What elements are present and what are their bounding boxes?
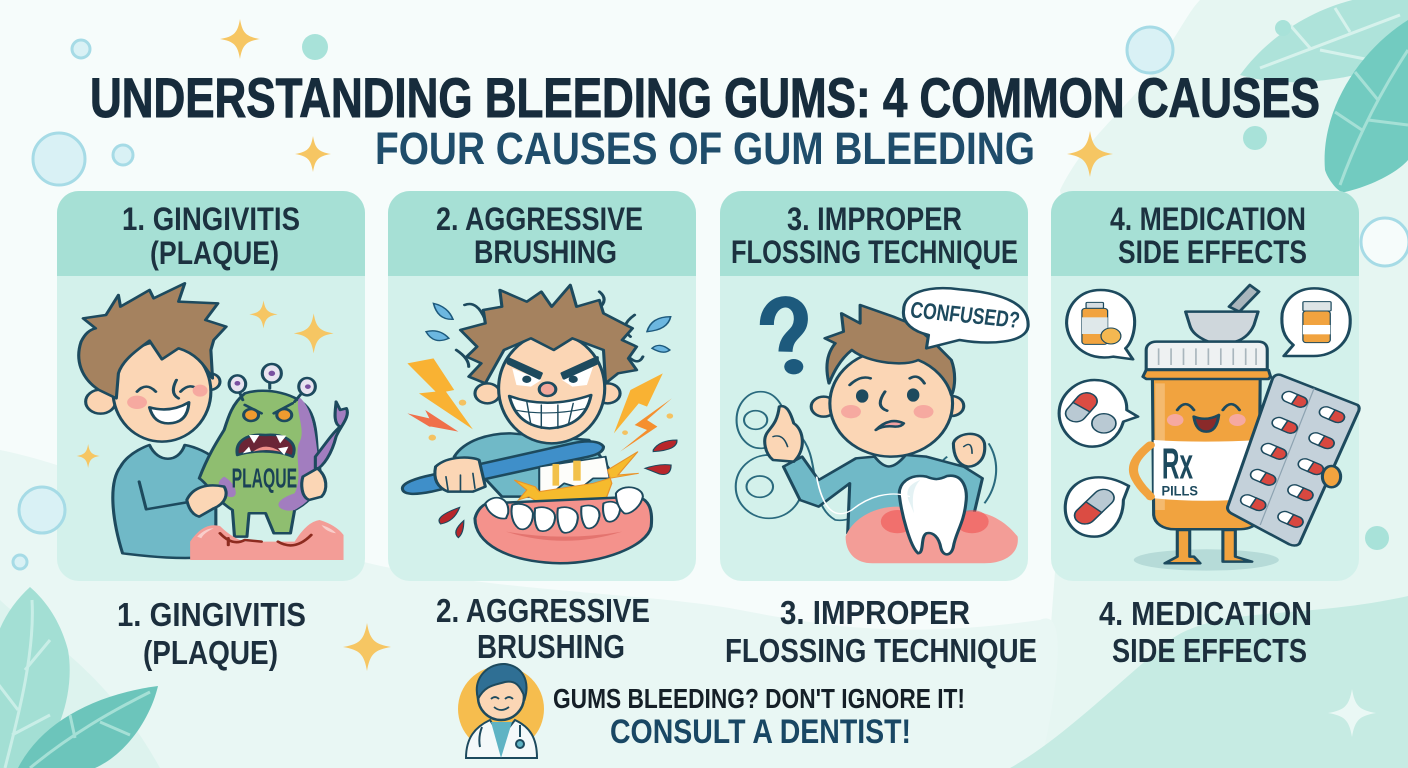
illustration: pill bottle mascot: Rx: [1162, 440, 1193, 488]
heading: aggressive brushing: 2. AGGRESSIVE: [436, 201, 643, 237]
caption: improper flossing: 3. IMPROPER: [780, 594, 970, 631]
heading: medication: 4. MEDICATION: [1110, 201, 1306, 237]
heading: gingivitis: (PLAQUE): [150, 235, 279, 271]
bubble: pill bottle and tablet: [1067, 290, 1135, 359]
heading: gingivitis: [122, 201, 300, 271]
heading: improper flossing: [731, 201, 1018, 270]
caption: aggressive brushing: 2. AGGRESSIVE: [436, 592, 650, 629]
illustration: pill bottle mascot: PILLS: [1162, 484, 1198, 499]
panel: improper flossing: [720, 191, 1028, 581]
speech bubble: confused: [903, 288, 1028, 348]
icon: question mark: [767, 302, 803, 374]
caption: gingivitis: 1. GINGIVITIS: [117, 596, 306, 633]
heading: medication: SIDE EFFECTS: [1118, 234, 1307, 270]
blister pack: [1228, 375, 1359, 545]
caption: aggressive brushing: [436, 592, 650, 665]
illustration: boy with plaque monster: PLAQUE: [232, 463, 297, 494]
heading: improper flossing: FLOSSING TECHNIQUE: [731, 234, 1018, 270]
callout: warning: GUMS BLEEDING? DON'T IGNORE IT!: [553, 683, 965, 714]
speech bubble: confused: CONFUSED?: [909, 298, 1021, 333]
illustration: angry brusher: [402, 285, 677, 563]
caption: medication: SIDE EFFECTS: [1112, 632, 1307, 669]
icon: mortar and pestle: [1186, 285, 1259, 342]
bubble: capsule: [1065, 477, 1129, 537]
illustration: confused flosser: [736, 288, 1028, 563]
decorative bubbles: [13, 27, 1408, 569]
leaf: top right light: [1240, 0, 1408, 82]
caption: medication: 4. MEDICATION: [1099, 595, 1312, 632]
caption: aggressive brushing: BRUSHING: [477, 628, 625, 665]
decorative bubble: over first panel: [19, 487, 65, 533]
subtitle: FOUR CAUSES OF GUM BLEEDING: [375, 123, 1035, 174]
heading: aggressive brushing: BRUSHING: [474, 234, 617, 270]
caption: gingivitis: [117, 596, 306, 671]
panel: aggressive brushing: [388, 191, 696, 581]
panel: medication side effects: [1051, 191, 1359, 581]
heading: gingivitis: 1. GINGIVITIS: [122, 201, 300, 237]
decorative dots: [302, 20, 1389, 550]
bubble: small bottle: [1282, 288, 1350, 356]
caption: improper flossing: [725, 594, 1037, 669]
heading: medication: [1110, 201, 1307, 270]
panel: gingivitis: [57, 191, 365, 581]
heading: improper flossing: 3. IMPROPER: [787, 201, 962, 237]
decorative sparkles: [220, 19, 1376, 737]
heading: aggressive brushing: [436, 201, 643, 270]
caption: gingivitis: (PLAQUE): [143, 634, 278, 671]
leaf: bottom left dark: [18, 686, 158, 768]
callout: consult a dentist: CONSULT A DENTIST!: [610, 713, 911, 751]
bubble: capsule and tablet: [1059, 380, 1138, 447]
illustration: boy with plaque monster: [77, 283, 347, 560]
caption: improper flossing: FLOSSING TECHNIQUE: [725, 632, 1037, 669]
leaf: top right dark: [1325, 20, 1408, 192]
icon: dentist: [458, 664, 544, 758]
caption: medication: [1099, 595, 1312, 669]
illustration: pill bottle mascot: [1059, 285, 1359, 571]
leaf: bottom left light: [0, 587, 70, 768]
